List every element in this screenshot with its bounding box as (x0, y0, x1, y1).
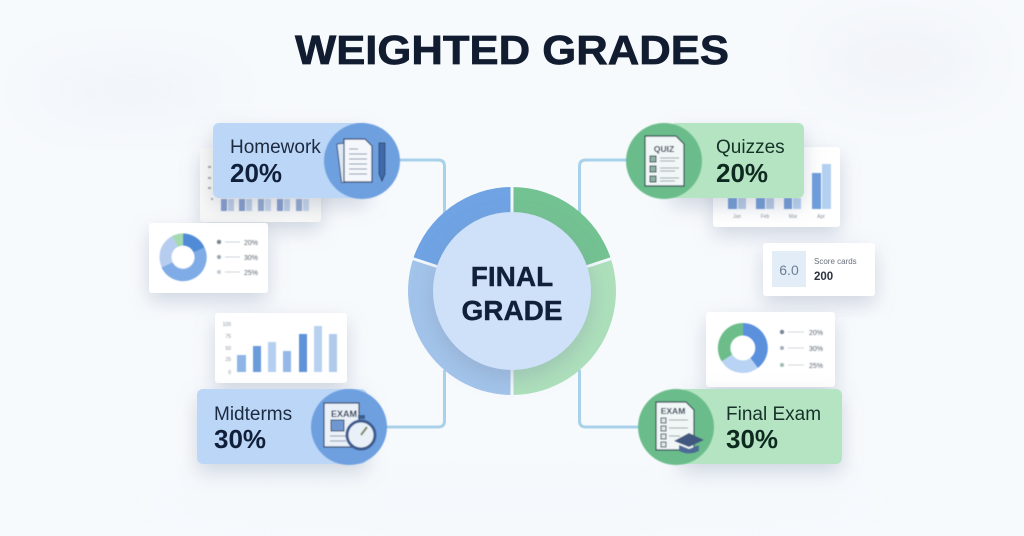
ring segment: homework (413, 187, 512, 291)
score number: 200 (814, 271, 833, 283)
ring segment: final exam (512, 259, 616, 395)
month labels (733, 214, 825, 220)
icon: exam and graduation cap: EXAM (661, 406, 685, 416)
midterms percent: 30% (214, 424, 266, 454)
panel: bar chart card right (713, 147, 840, 227)
midterms label: Midterms (214, 404, 292, 425)
icon: homework papers (324, 123, 400, 199)
panel: score card: 6.0 (779, 262, 799, 278)
month labels: Feb (761, 214, 770, 220)
axis labels: 75 (225, 334, 231, 340)
panel: final exam (638, 389, 842, 465)
icon: quiz sheet: QUIZ (654, 144, 674, 154)
ring segment: midterms (408, 259, 512, 395)
icon: exam and stopwatch: EXAM (331, 409, 357, 419)
final exam percent: 30% (726, 424, 778, 454)
center label: FINAL (471, 261, 553, 292)
mini bars (221, 199, 309, 211)
axis labels: 25 (225, 357, 231, 363)
icon: exam and graduation cap (638, 389, 714, 465)
icon: quiz sheet (626, 123, 702, 199)
panel: quizzes (626, 123, 804, 199)
ring segment: quizzes (512, 187, 611, 291)
central donut: final grade (408, 185, 616, 397)
axis labels (223, 322, 231, 376)
month labels: Mar (789, 214, 798, 220)
donut legend left (217, 240, 258, 277)
quizzes percent: 20% (716, 158, 768, 188)
axis labels: 50 (225, 346, 231, 352)
quizzes label: Quizzes (716, 137, 785, 158)
bars (237, 326, 337, 372)
panel: bar chart card (215, 313, 347, 383)
icon: exam and stopwatch (311, 389, 387, 465)
donut chart right (724, 329, 762, 367)
month labels: Apr (817, 214, 825, 220)
donut legend right: 20% (809, 330, 823, 337)
donut legend right: 25% (809, 363, 823, 370)
donut legend left: 25% (244, 270, 258, 277)
axis labels: 100 (223, 322, 231, 328)
connector lines (385, 160, 650, 427)
homework label: Homework (230, 137, 321, 158)
score label: Score cards (814, 257, 857, 266)
score value (772, 251, 806, 287)
donut legend left: 20% (244, 240, 258, 247)
panel: homework (213, 123, 400, 199)
homework percent: 20% (230, 158, 282, 188)
axis labels: 0 (228, 370, 231, 376)
center disc (433, 212, 591, 370)
donut legend right (780, 330, 823, 370)
month labels: Jan (733, 214, 741, 220)
faint table labels (208, 167, 213, 199)
donut legend left: 30% (244, 255, 258, 262)
panel: midterms (197, 389, 387, 465)
donut chart left (166, 240, 201, 275)
final exam label: Final Exam (726, 404, 821, 425)
donut legend right: 30% (809, 346, 823, 353)
panel: score card (763, 243, 875, 296)
panel: table card behind homework (200, 148, 321, 222)
bars (728, 164, 831, 209)
center label: GRADE (461, 295, 563, 326)
panel: donut card left (149, 223, 268, 293)
title: WEIGHTED GRADES (295, 27, 729, 73)
panel: donut card right (706, 312, 835, 387)
